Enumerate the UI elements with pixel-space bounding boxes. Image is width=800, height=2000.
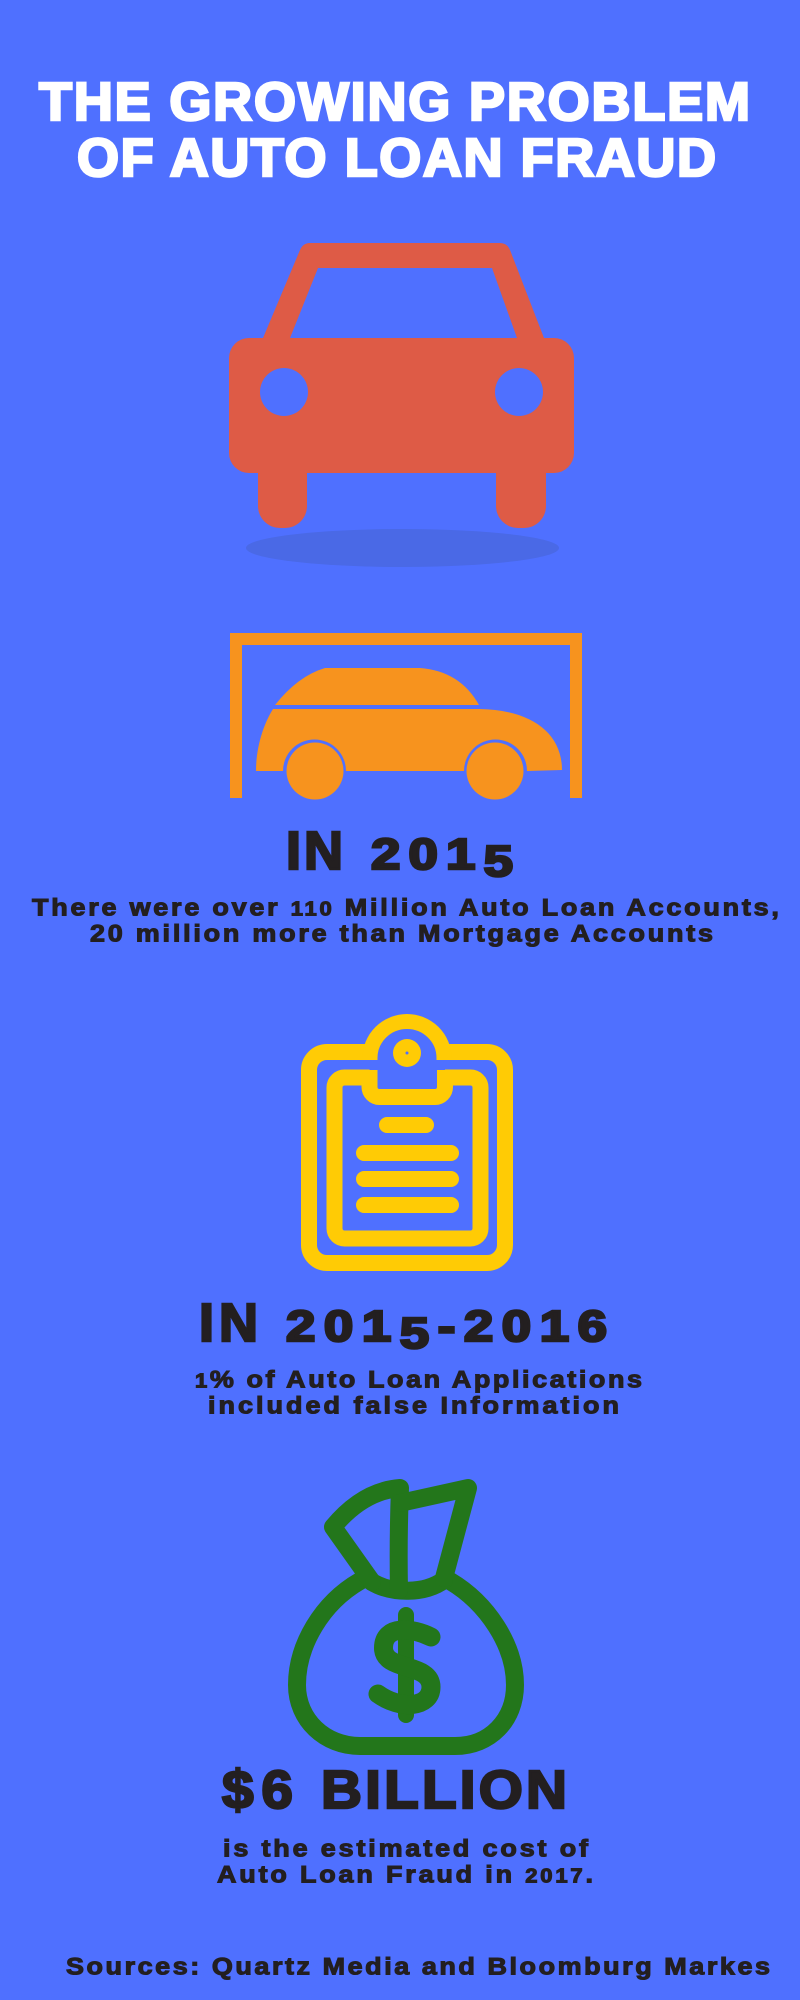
heading: in 2015-2016 bbox=[199, 1293, 607, 1358]
heading: in 2015-2016: 201 bbox=[286, 1302, 391, 1351]
heading: in 2015-2016: 2016 bbox=[464, 1302, 607, 1351]
text: estimated cost line 1: is the estimated cost of bbox=[223, 1836, 588, 1862]
heading: in 2015-2016: 5 bbox=[400, 1309, 429, 1358]
text: false information line 2: included false Information bbox=[208, 1393, 619, 1419]
heading: in 2015 bbox=[286, 821, 513, 886]
heading: in 2015: IN bbox=[286, 821, 343, 881]
title: OF AUTO LOAN FRAUD bbox=[77, 128, 716, 188]
heading: in 2015: 201 bbox=[371, 830, 475, 879]
text: auto loan accounts line 2: 20 million more than Mortgage Accounts bbox=[90, 921, 713, 947]
heading: 6 billion: BILLION bbox=[321, 1759, 567, 1820]
icon: green money bag bbox=[297, 1488, 515, 1746]
text: auto loan accounts line 1: There were over 110 Million Auto Loan Accounts, bbox=[32, 895, 779, 921]
icon: orange car in garage bbox=[230, 633, 582, 800]
heading: in 2015-2016: IN bbox=[199, 1293, 258, 1353]
text: estimated cost line 2: Auto Loan Fraud in 2017. bbox=[217, 1862, 593, 1888]
icon: yellow clipboard bbox=[309, 1022, 505, 1263]
text: false information line 1: 1% of Auto Loan Applications bbox=[195, 1367, 642, 1393]
icon: red car front view bbox=[229, 243, 574, 567]
title: THE GROWING PROBLEM bbox=[39, 72, 750, 132]
title bbox=[39, 72, 750, 188]
heading: in 2015-2016: - bbox=[438, 1302, 455, 1351]
sources: Sources: Quartz Media and Bloomburg Markes bbox=[66, 1954, 770, 1980]
heading: 6 billion: $6 bbox=[222, 1759, 293, 1820]
heading: in 2015: 5 bbox=[484, 837, 513, 886]
